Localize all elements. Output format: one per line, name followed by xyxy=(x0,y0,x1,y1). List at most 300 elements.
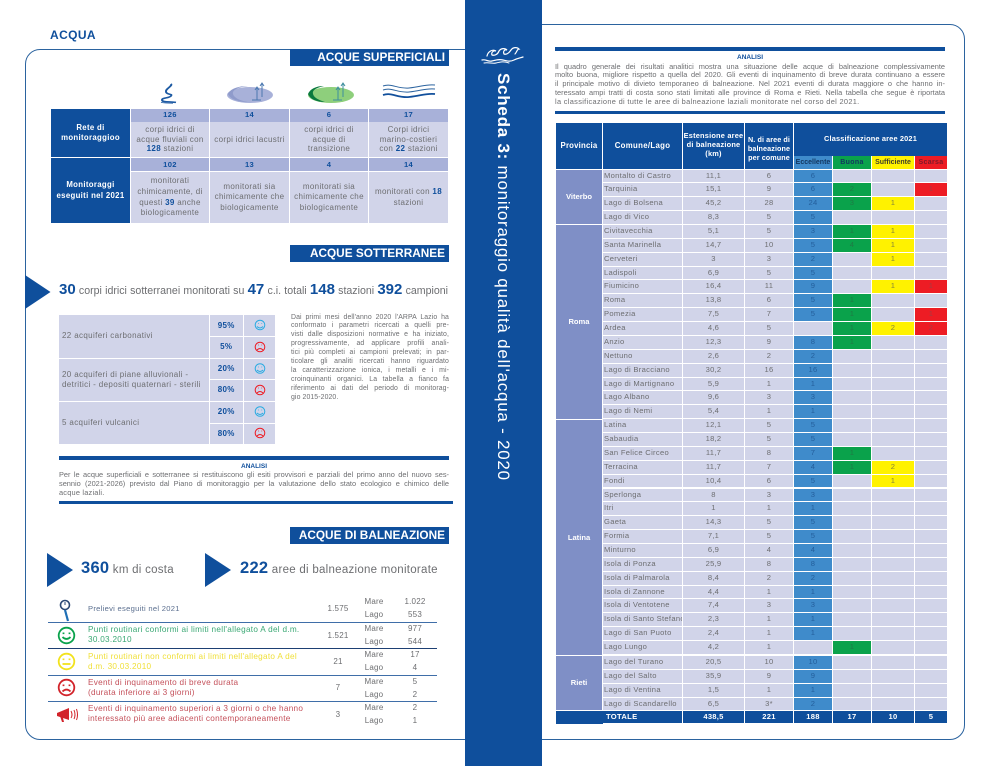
list: bathing statistics: 2 xyxy=(413,703,417,712)
table rows: Roma: 5 xyxy=(811,268,815,277)
table rows: Roma: Anzio xyxy=(604,337,624,346)
total row: 221 xyxy=(762,712,776,720)
icon: transitional water xyxy=(308,82,354,103)
table rows: Latina xyxy=(603,419,947,654)
list: bathing statistics: Lago xyxy=(365,690,383,699)
table rows: Roma: 5 xyxy=(811,295,815,304)
table rows: Roma: 2 xyxy=(891,323,895,332)
table: bathing area classification: per comune xyxy=(748,153,790,162)
analysis text: molto buona, migliore rispetto a quella del 2020. Gli eventi di inquinamento di breve durata continuano a essere xyxy=(555,70,945,79)
table rows: Latina: 11,7 xyxy=(706,462,721,471)
table rows: Latina: Sperlonga xyxy=(604,490,641,498)
table rows: Viterbo: 6 xyxy=(811,170,815,180)
table: bathing area classification: Scarsa xyxy=(919,159,943,166)
table: surface waters: 13 xyxy=(245,160,254,169)
table rows: Latina: Lago di San Puoto xyxy=(604,628,672,637)
table: aquifers: 20% xyxy=(218,407,235,416)
row: monitoraggi eseguiti xyxy=(51,158,130,223)
table: bathing area classification: (km) xyxy=(705,149,722,158)
list: bathing statistics: Lago xyxy=(365,716,383,725)
table rows: Latina: 6 xyxy=(767,476,771,485)
table rows: Roma: 9,6 xyxy=(708,392,719,401)
row: short pollution: (durata inferiore ai 3 giorni) xyxy=(88,688,195,697)
table rows: Latina: 2,3 xyxy=(708,614,719,623)
table rows: Roma: Lago Albano xyxy=(604,392,650,401)
province: Latina: Latina xyxy=(568,532,590,542)
table rows: Latina: Fondi xyxy=(604,476,624,485)
row: compliant points: 30.03.2010 xyxy=(88,635,132,644)
table rows: Viterbo: 1 xyxy=(929,184,933,193)
table rows: Rieti: 6,5 xyxy=(708,699,719,708)
groundwater paragraph: progressivamente, ad applicare profili anali- xyxy=(291,340,449,347)
icon: megaphone xyxy=(57,708,78,722)
list: bathing statistics: Lago xyxy=(365,663,383,672)
table rows: Roma: Civitavecchia xyxy=(604,226,653,235)
table rows: Viterbo: 3 xyxy=(850,198,854,207)
analysis text: il principale motivo di divieto temporaneo di balneazione. Nel 2021 eventi di durata maggiore o che hanno in- xyxy=(555,79,945,88)
table rows: Latina: Itri xyxy=(604,503,614,512)
analysis text: Il quadro generale dei risultati analitici mostra una situazione delle acque di balneazione complessivamente xyxy=(555,62,945,70)
table rows: Latina: 1 xyxy=(850,642,854,651)
groundwater paragraph: Dai primi mesi dell'anno 2020 l'ARPA Lazio ha xyxy=(291,314,449,320)
table: bathing area classification: Sufficiente xyxy=(875,159,911,166)
table rows: Viterbo: 9 xyxy=(767,184,771,193)
table rows: Latina: 1 xyxy=(767,628,771,637)
table: surface waters: stazioni xyxy=(394,198,423,206)
table: surface waters: corpi idrici di xyxy=(145,125,195,134)
list: bathing statistics: Mare xyxy=(364,677,384,686)
table rows: Latina: 10,4 xyxy=(706,476,721,485)
table: surface waters: acque di xyxy=(313,135,345,144)
heading: acque sotterranee xyxy=(290,245,449,262)
table rows: Latina: 5 xyxy=(811,517,815,526)
province: Latina xyxy=(556,420,602,654)
list: bathing statistics: Lago xyxy=(365,610,383,619)
table rows: Latina: 1 xyxy=(767,642,771,651)
table: bathing area classification: Buona xyxy=(840,159,864,166)
table rows: Roma: 7,5 xyxy=(708,309,719,318)
table rows: Rieti: Lago di Scandarello xyxy=(604,699,677,708)
table rows: Latina: Minturno xyxy=(604,545,636,554)
table: bathing area classification: N. di aree di xyxy=(748,135,790,144)
row: long pollution: interessato più aree adiacenti contemporaneamente xyxy=(88,714,291,723)
table: surface waters: monitorati con 18 xyxy=(375,187,442,196)
table rows: Roma: Ardea xyxy=(604,323,626,332)
table rows: Viterbo: 2 xyxy=(850,184,854,193)
table rows: Roma: 12,3 xyxy=(706,337,721,346)
table: aquifers: 5% xyxy=(220,342,232,351)
spine title: Scheda 3: monitoraggio qualità dell'acqua - 2020 xyxy=(494,73,513,481)
groundwater paragraph: visti dalle disposizioni normative e ha iniziato, xyxy=(291,331,449,338)
groundwater paragraph xyxy=(291,314,449,401)
icons: happy and sad faces xyxy=(254,320,266,438)
table: surface waters: 126 xyxy=(163,110,177,119)
table rows: Latina: 5 xyxy=(811,434,815,443)
table rows: Roma: 13,8 xyxy=(706,295,721,304)
table rows: Latina: 5 xyxy=(767,531,771,540)
table rows: Latina: 8 xyxy=(711,490,716,498)
table rows: Rieti: 10 xyxy=(765,657,773,666)
table: bathing area classification: balneazione xyxy=(748,144,790,153)
table: surface waters: corpi idrici lacustri xyxy=(214,135,285,144)
table: aquifers: 95% xyxy=(218,321,235,330)
table: surface waters: monitorati sia xyxy=(223,182,276,191)
list: bathing statistics: 544 xyxy=(408,637,422,646)
table rows: Roma: 4 xyxy=(850,240,854,249)
central blue spine xyxy=(465,0,542,766)
table rows: Roma: 5 xyxy=(767,226,771,235)
icon: waves logo xyxy=(481,47,524,64)
list: bathing statistics: 21 xyxy=(333,657,343,666)
row: compliant points xyxy=(88,625,300,644)
table rows: Latina: 2 xyxy=(767,573,771,582)
table rows: Viterbo: Lago di Bolsena xyxy=(604,198,663,207)
table rows: Roma: 1 xyxy=(850,295,854,304)
table rows: Viterbo: Tarquinia xyxy=(604,184,638,193)
table rows: Roma: Lago di Martignano xyxy=(604,379,674,388)
table rows: Roma: Ladispoli xyxy=(604,268,637,277)
table rows: Latina: 4 xyxy=(767,545,771,554)
table rows: Roma: 16 xyxy=(765,365,773,374)
table rows: Roma: 10 xyxy=(765,240,773,249)
analysis text xyxy=(555,62,945,106)
table rows: Latina: 8 xyxy=(767,448,771,457)
table rows: Latina: Isola di Palmarola xyxy=(604,573,670,582)
list: bathing statistics: Mare xyxy=(364,650,384,659)
analysis heading: ANALISI xyxy=(241,463,267,470)
row: compliant points: Punti routinari conformi ai limiti nell'allegato A del d.m. xyxy=(88,625,300,634)
table rows: Viterbo: 1 xyxy=(891,198,895,207)
table: surface waters: biologicamente xyxy=(141,208,199,217)
table rows: Latina: 4 xyxy=(811,545,815,554)
row: short pollution: Eventi di inquinamento di breve durata xyxy=(88,678,238,687)
table rows: Latina: 14,3 xyxy=(706,517,721,526)
table rows: Rieti: 2 xyxy=(811,699,815,708)
table rows: Latina: 8,4 xyxy=(708,573,719,582)
table rows: Latina: 8 xyxy=(767,559,771,568)
table rows: Roma xyxy=(603,225,947,418)
table rows: Rieti: 1,5 xyxy=(708,685,719,694)
table: surface waters: 14 xyxy=(245,110,254,119)
list: bathing statistics: Lago xyxy=(365,637,383,646)
icon: lake xyxy=(227,82,273,103)
table: surface waters: 102 xyxy=(163,160,177,169)
table: surface waters: Corpi idrici xyxy=(388,125,429,134)
heading: acque sotterranee: ACQUE SOTTERRANEE xyxy=(310,246,445,260)
groundwater paragraph: tici più completi ai campioni prelevati; in par- xyxy=(291,349,449,356)
table rows: Latina: 1 xyxy=(891,476,895,485)
analysis heading: ANALISI xyxy=(737,54,763,61)
list: bathing statistics: 17 xyxy=(410,650,420,659)
table: surface waters: 14 xyxy=(404,160,413,169)
analysis box: left page xyxy=(59,456,453,504)
row: rete di monitoraggio: Rete di xyxy=(76,122,105,132)
total row: 17 xyxy=(848,712,856,720)
groundwater paragraph: la caratterizzazione ionica, i metalli e i mi- xyxy=(291,367,449,374)
province: Roma: Roma xyxy=(568,317,590,326)
table rows: Rieti: 3* xyxy=(765,699,773,708)
table rows: Roma: Nettuno xyxy=(604,351,633,360)
table rows: Latina: Latina xyxy=(604,420,626,429)
table: surface waters xyxy=(51,109,448,223)
table rows: Viterbo: 28 xyxy=(765,198,773,207)
table rows: Roma: Lago di Bracciano xyxy=(604,365,670,374)
table rows: Roma: 9 xyxy=(811,281,815,290)
table rows: Roma: Roma xyxy=(604,295,625,304)
table rows: Roma: 6,9 xyxy=(708,268,719,277)
table rows: Viterbo: 5 xyxy=(811,212,815,221)
table rows: Roma: 1 xyxy=(929,281,933,290)
table rows: Latina: Isola di Ponza xyxy=(604,559,656,568)
table rows: Roma: 5 xyxy=(767,268,771,277)
row: long pollution: Eventi di inquinamento superiori a 3 giorni o che hanno xyxy=(88,704,303,713)
table rows: Roma: Lago di Nemi xyxy=(604,406,652,415)
stat: bathing areas: 222 aree di balneazione monitorate xyxy=(240,559,438,577)
table rows: Roma: 30,2 xyxy=(706,365,721,374)
province: Rieti: Rieti xyxy=(571,678,587,687)
table rows: Latina: 5 xyxy=(767,420,771,429)
table rows: Roma: 2 xyxy=(767,351,771,360)
icon: sea waves xyxy=(382,84,436,98)
analysis text: teressato ampi tratti di costa sono stati limitati alle province di Roma e Rieti. Nella tabella che segue è riportata xyxy=(555,88,945,97)
table rows: Roma: 16 xyxy=(809,365,817,374)
table rows: Latina: 6,9 xyxy=(708,545,719,554)
table: surface waters: 4 xyxy=(327,160,331,169)
table: aquifers: 20 acquiferi di piane alluvionali - xyxy=(62,370,188,379)
table rows: Latina: San Felice Circeo xyxy=(604,448,669,457)
table rows: Rieti xyxy=(603,656,947,710)
table rows: Roma: 1 xyxy=(767,406,771,415)
table rows: Roma: 3 xyxy=(767,392,771,401)
arrow: groundwater xyxy=(25,275,50,309)
table rows: Roma: 11 xyxy=(765,281,773,290)
table rows: Latina: Lago Lungo xyxy=(604,642,647,651)
row: rete di monitoraggio xyxy=(51,109,130,157)
list: bathing statistics: 2 xyxy=(413,690,417,699)
icon: river xyxy=(160,83,176,104)
total row: TOTALE xyxy=(606,712,637,720)
table rows: Roma: 1 xyxy=(891,254,895,263)
row: long pollution xyxy=(88,704,303,723)
table rows: Roma: 1 xyxy=(850,309,854,318)
table rows: Latina: 3 xyxy=(811,600,815,609)
table: bathing area classification: Provincia xyxy=(561,141,597,150)
groundwater paragraph: riferimento ai dati del periodo di monitorag- xyxy=(291,385,449,392)
list: bathing statistics: 4 xyxy=(413,663,417,672)
table rows: Viterbo: 15,1 xyxy=(706,184,721,193)
table rows: Roma: 16,4 xyxy=(706,281,721,290)
table rows: Roma: 5,4 xyxy=(708,406,719,415)
list: bathing statistics xyxy=(48,597,437,725)
table rows: Latina: 5 xyxy=(767,434,771,443)
table rows: Roma: 2,6 xyxy=(708,351,719,360)
table rows: Roma: 3 xyxy=(811,226,815,235)
table rows: Roma: 3 xyxy=(811,392,815,401)
left page frame xyxy=(25,49,485,740)
table rows: Latina: 1 xyxy=(767,614,771,623)
table rows: Rieti: Lago del Turano xyxy=(604,657,663,666)
row: non compliant points: Punti routinari non conformi ai limiti nell'allegato A del xyxy=(88,652,297,660)
province: Viterbo xyxy=(556,170,602,224)
table: bathing area classification: Classificazione aree 2021 xyxy=(824,134,917,143)
list: bathing statistics: 1.575 xyxy=(327,604,349,613)
total row: 188 xyxy=(806,712,820,720)
table: bathing area classification: Estensione aree xyxy=(684,131,743,140)
table rows: Latina: Isola di Zannone xyxy=(604,587,665,596)
analysis text: acque laziali. xyxy=(59,488,105,497)
row: non compliant points: d.m. 30.03.2010 xyxy=(88,662,151,671)
table rows: Latina: 7 xyxy=(767,462,771,471)
groundwater paragraph: ticolare gli analiti ricercati hanno riguardato xyxy=(291,358,449,365)
analysis text: la classificazione di tutte le aree di balneazione laziali monitorate nel corso del 2021. xyxy=(555,97,860,106)
table rows: Latina: 1 xyxy=(767,503,771,512)
table rows: Viterbo: 11,1 xyxy=(706,170,721,180)
table: surface waters: monitorati xyxy=(151,176,189,185)
table rows: Latina: 4 xyxy=(811,462,815,471)
table rows: Roma: 6 xyxy=(767,295,771,304)
table rows: Roma: 9 xyxy=(767,337,771,346)
row: rete di monitoraggio: monitoraggioo xyxy=(61,133,120,142)
table rows: Rieti: 10 xyxy=(809,657,817,666)
analysis text: sennio (2021-2026) previsto dal Piano di monitoraggio per la valutazione dello stato ecologico e chimico delle xyxy=(59,479,449,488)
table rows: Roma: 1 xyxy=(891,281,895,290)
analysis text xyxy=(59,470,449,497)
list: bathing statistics: 977 xyxy=(408,624,422,633)
table rows: Rieti: 20,5 xyxy=(706,657,721,666)
table rows: Latina: 1 xyxy=(811,614,815,623)
table rows: Roma: 1 xyxy=(850,337,854,346)
table rows: Latina: 5 xyxy=(767,517,771,526)
table rows: Roma: Pomezia xyxy=(604,309,636,318)
table rows: Rieti: 1 xyxy=(767,685,771,694)
table: surface waters: corpi idrici di xyxy=(304,125,354,134)
table: surface waters: chimicamente, di xyxy=(137,187,203,196)
list: bathing statistics: 1 xyxy=(413,716,417,725)
table: bathing area classification: Comune/Lago xyxy=(615,141,670,150)
table: aquifers: 20% xyxy=(218,364,235,373)
table rows: Viterbo: 6 xyxy=(767,170,771,180)
table: surface waters: transizione xyxy=(308,144,350,153)
table rows: Viterbo: 5 xyxy=(767,212,771,221)
table rows: Latina: Terracina xyxy=(604,462,638,471)
table rows: Latina: Isola di Ventotene xyxy=(604,600,670,609)
table: bathing area classification: Eccellente xyxy=(796,159,830,166)
table: surface waters: 6 xyxy=(327,110,331,119)
table: surface waters: monitorati sia xyxy=(303,182,355,191)
table rows: Latina: 8 xyxy=(811,559,815,568)
table rows: Roma: 3 xyxy=(711,254,716,263)
table rows: Latina: 4,4 xyxy=(708,587,719,596)
total row: 5 xyxy=(929,712,933,720)
total row: 438,5 xyxy=(703,712,724,720)
table rows: Roma: 5 xyxy=(811,240,815,249)
table: aquifers: 80% xyxy=(218,385,235,394)
right page frame xyxy=(520,24,965,740)
row: samples: Prelievi eseguiti nel 2021 xyxy=(88,604,180,613)
table rows: Latina: 5 xyxy=(811,476,815,485)
table rows: Viterbo: Lago di Vico xyxy=(604,212,649,221)
table: surface waters: biologicamente xyxy=(220,203,279,212)
table rows: Viterbo: Montalto di Castro xyxy=(604,170,671,180)
list: bathing statistics: Mare xyxy=(364,624,384,633)
table rows: Latina: Gaeta xyxy=(604,517,626,526)
table rows: Roma: 1 xyxy=(811,379,815,388)
table: bathing area classification xyxy=(556,123,947,169)
table rows: Roma: 5,9 xyxy=(708,379,719,388)
arrow: bathing areas xyxy=(205,553,231,587)
table: surface waters: acque fluviali con xyxy=(136,135,204,144)
table: surface waters: con 22 stazioni xyxy=(379,144,438,153)
table rows: Latina: 11,7 xyxy=(706,448,721,457)
table rows: Latina: 5 xyxy=(811,420,815,429)
table: surface waters: marino-costieri xyxy=(380,135,437,144)
table rows: Latina: 1 xyxy=(767,587,771,596)
table rows: Latina: 1 xyxy=(850,462,854,471)
table rows: Latina: 1 xyxy=(711,503,716,512)
icon: magnifier xyxy=(60,600,70,622)
table rows: Roma: 5 xyxy=(767,323,771,332)
icon: yellow neutral xyxy=(58,652,76,670)
row: monitoraggi eseguiti: eseguiti nel 2021 xyxy=(56,190,124,200)
analysis text: Per le acque superficiali e sotterranee si restituiscono gli esiti provvisori e parziali del primo anno del nuovo ses- xyxy=(59,470,449,479)
table rows: Latina: 2 xyxy=(811,573,815,582)
table: surface waters: questi 39 anche xyxy=(139,198,201,206)
row: short pollution xyxy=(88,678,238,697)
heading: ACQUA: ACQUA xyxy=(50,28,96,42)
arrow: coast xyxy=(47,553,73,587)
table rows: Latina: Sabaudia xyxy=(604,434,638,443)
groundwater paragraph: conformato i parametri ricercati a quelli pre- xyxy=(291,322,449,329)
table rows: Roma: 4,6 xyxy=(708,323,719,332)
table rows: Roma: 7 xyxy=(767,309,771,318)
analysis box: right page xyxy=(555,47,945,114)
groundwater headline numbers: 30 corpi idrici sotterranei monitorati su 47 c.i. totali 148 stazioni 392 campioni xyxy=(59,281,448,298)
table rows: Latina: 1 xyxy=(850,448,854,457)
table rows: Roma: 8 xyxy=(811,337,815,346)
table rows: Roma: 2 xyxy=(811,254,815,263)
table rows: Roma: 1 xyxy=(811,406,815,415)
table: aquifers: 5 acquiferi vulcanici xyxy=(62,418,139,427)
list: bathing statistics: 7 xyxy=(336,683,340,692)
list: bathing statistics: 553 xyxy=(408,610,422,619)
table rows: Roma: 5 xyxy=(811,309,815,318)
table rows: Latina: 5 xyxy=(811,531,815,540)
table rows: Latina: 3 xyxy=(767,490,771,498)
table: surface waters: 17 xyxy=(404,110,413,119)
province: Viterbo: Viterbo xyxy=(566,192,592,201)
groundwater paragraph: croinquinanti organici. La tabella a fianco fa xyxy=(291,376,449,383)
province: Roma xyxy=(556,225,602,418)
table: bathing area classification: di balneazione xyxy=(687,140,740,149)
table: surface waters: 128 stazioni xyxy=(147,144,193,153)
table rows: Viterbo: 24 xyxy=(809,198,817,207)
table: aquifers: detritici - depositi quaternari - sterili xyxy=(62,380,201,388)
table rows: Roma: 5,1 xyxy=(708,226,719,235)
total row xyxy=(603,711,947,723)
table rows: Roma: 1 xyxy=(929,309,933,318)
table rows: Latina: 7 xyxy=(811,448,815,457)
table rows: Roma: 1 xyxy=(891,240,895,249)
total row background xyxy=(556,710,603,724)
table rows: Latina: 3 xyxy=(767,600,771,609)
table rows: Latina: 7,4 xyxy=(708,600,719,609)
table rows: Viterbo xyxy=(603,170,947,224)
table rows: Latina: 18,2 xyxy=(706,434,721,443)
list: bathing statistics: 1.521 xyxy=(327,631,349,640)
table: aquifers: 22 acquiferi carbonativi xyxy=(62,331,153,340)
table rows: Latina: 1 xyxy=(811,587,815,596)
table rows: Latina: 25,9 xyxy=(706,559,721,568)
